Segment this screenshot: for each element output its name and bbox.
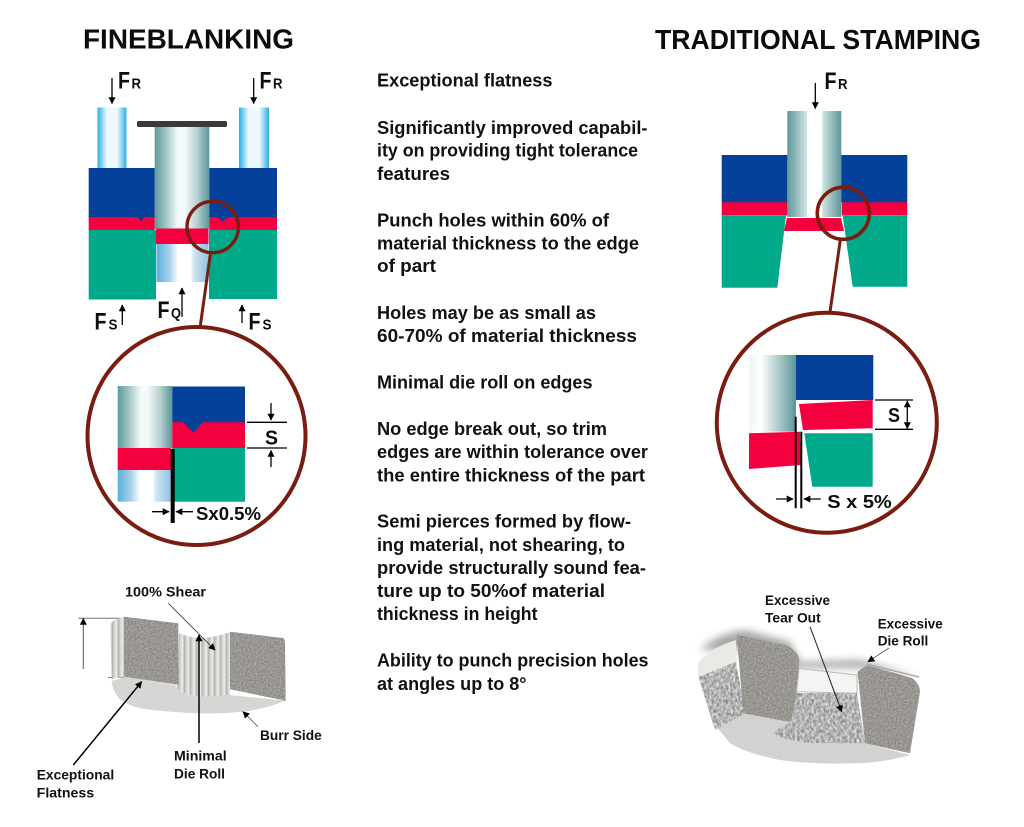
excessive die roll callout: Die Roll: [878, 633, 928, 649]
force FQ label: F: [158, 297, 170, 324]
S dimension: S: [888, 405, 900, 427]
minimal die roll callout: [174, 635, 227, 781]
benefit: punch holes: material thickness to the edge: [377, 234, 639, 254]
left force FR label: [112, 68, 141, 104]
magnifier circle and stem: [817, 187, 869, 312]
left force FR label: R: [132, 76, 141, 92]
detail punch: [118, 386, 172, 448]
benefit: edge break: [377, 419, 648, 486]
excessive die roll edge: [867, 664, 919, 677]
benefit: edge break: edges are within tolerance over: [377, 442, 648, 462]
excessive die roll callout: [868, 615, 943, 662]
right force FS label: S: [262, 316, 272, 334]
excessive tear out callout: Excessive: [765, 592, 830, 608]
excessive tear out callout: [765, 592, 842, 712]
red workpiece strip: [89, 216, 277, 230]
bottom disc: [713, 713, 910, 764]
left ground face: [737, 635, 799, 723]
detail green die: [804, 433, 873, 487]
benefit: tolerance: ity on providing tight tolerance: [377, 141, 638, 161]
height arrow: [82, 618, 84, 669]
exceptional flatness callout: Exceptional: [37, 766, 114, 782]
benefit: edge break: No edge break out, so trim: [377, 419, 607, 439]
S x 5% dimension: S x 5%: [827, 492, 892, 512]
right pressure pin: [239, 108, 269, 168]
minimal die roll callout: Minimal: [174, 748, 227, 764]
right force FR label: F: [260, 68, 272, 94]
fineblanking part illustration: [37, 584, 322, 800]
force FR label: F: [824, 68, 836, 95]
right ground face: [230, 632, 286, 701]
benefit: die roll: Minimal die roll on edges: [377, 372, 592, 392]
exceptional flatness callout: [37, 682, 142, 800]
detail red material: [749, 400, 873, 469]
ejector: [156, 244, 208, 282]
benefit: angled holes: Ability to punch precision holes: [377, 651, 648, 671]
magnifier circle and stem: [187, 201, 238, 326]
benefit: angled holes: [377, 651, 648, 694]
right force FR label: [254, 68, 283, 104]
100% shear callout: 100% Shear: [125, 584, 207, 600]
force FQ label: Q: [171, 305, 181, 322]
S dimension: S: [265, 428, 278, 450]
title: fineblanking: FINEBLANKING: [83, 24, 294, 54]
right force FR label: R: [273, 76, 283, 92]
clearance lines: [796, 417, 801, 508]
blue stripper plates: [722, 155, 907, 202]
punch plate: [137, 121, 227, 127]
punch: [787, 111, 841, 217]
exceptional flatness callout: Flatness: [37, 784, 94, 800]
left ground face: [124, 617, 179, 685]
stamping part illustration: [698, 592, 943, 764]
red slug: [784, 218, 844, 231]
benefit: angled holes: at angles up to 8°: [377, 674, 526, 694]
center torn wall: [773, 693, 865, 743]
detail circle: [88, 327, 306, 545]
benefit: semi pierces: Semi pierces formed by flow-: [377, 512, 631, 532]
detail blue plate: [796, 355, 873, 400]
right force FS label: F: [248, 308, 260, 336]
detail red material: [118, 421, 245, 470]
central punch: [155, 127, 209, 229]
right ground face: [858, 665, 920, 753]
excessive die roll callout: Excessive: [878, 615, 943, 631]
benefit: tolerance: [377, 118, 648, 184]
benefit: punch holes: of part: [377, 256, 436, 276]
left torn wall: [698, 662, 745, 730]
title: traditional stamping: TRADITIONAL STAMPING: [655, 24, 981, 55]
benefit: semi pierces: ing material, not shearing, to: [377, 535, 625, 555]
benefit: semi pierces: provide structurally sound fea-: [377, 558, 646, 578]
100% shear callout: [125, 584, 215, 650]
left force FR label: F: [118, 68, 130, 94]
S dimension: [247, 403, 287, 467]
benefit: punch holes: [377, 211, 639, 276]
green dies: [89, 230, 277, 300]
blue stripper plates with notches: [89, 168, 277, 222]
left die roll band: [698, 640, 737, 677]
green tapered dies: [722, 216, 907, 288]
force FR label: R: [838, 76, 848, 93]
benefit: tolerance: features: [377, 164, 450, 184]
dimension marks: [78, 618, 124, 678]
burr side callout: [243, 712, 322, 743]
center die roll band: [797, 668, 857, 693]
clearance line: [171, 449, 175, 523]
benefit: flatness: Exceptional flatness: [377, 71, 552, 91]
benefit: semi pierces: thickness in height: [377, 604, 538, 624]
left force FS label: S: [108, 316, 118, 334]
detail blue plate with notch: [172, 386, 245, 433]
benefit: semi pierces: ture up to 50%of material: [377, 581, 605, 601]
stamping magnified clearance detail: [717, 313, 937, 533]
benefit: small holes: Holes may be as small as: [377, 303, 596, 323]
detail punch: [749, 355, 796, 432]
S dimension: [875, 400, 913, 429]
force FQ label: [158, 288, 182, 324]
bottom disc: [112, 677, 286, 713]
benefit: punch holes: Punch holes within 60% of: [377, 211, 610, 231]
fineblanking press diagram: [89, 68, 283, 336]
benefits list: [377, 71, 648, 694]
benefit: semi pierces: [377, 512, 646, 624]
Sx0.5% dimension: Sx0.5%: [196, 504, 261, 524]
detail circle: [717, 313, 937, 533]
shadow behind part: [700, 630, 918, 676]
detail green die: [172, 448, 245, 502]
excessive tear out callout: Tear Out: [765, 610, 821, 626]
benefit: tolerance: Significantly improved capabil-: [377, 118, 648, 138]
benefit: small holes: [377, 303, 637, 346]
red workpiece strip: [722, 202, 907, 216]
right force FS label: [242, 305, 272, 336]
detail ejector: [118, 470, 171, 502]
minimal die roll callout: Die Roll: [174, 765, 225, 781]
hole sheared wall: [175, 632, 230, 697]
left force FS label: F: [94, 308, 106, 336]
left pressure pin: [98, 108, 126, 168]
traditional stamping press diagram: [722, 68, 907, 312]
benefit: small holes: 60-70% of material thickness: [377, 326, 637, 346]
benefit: edge break: the entire thickness of the part: [377, 466, 645, 486]
left force FS label: [94, 305, 122, 336]
S x 5% dimension: [776, 492, 892, 512]
left shear edge: [110, 617, 124, 679]
Sx0.5% dimension: [152, 504, 261, 524]
red blank slug: [156, 228, 208, 244]
burr side callout: Burr Side: [260, 727, 322, 743]
fineblanking magnified clearance detail: [88, 327, 306, 545]
force FR label: [815, 68, 848, 108]
